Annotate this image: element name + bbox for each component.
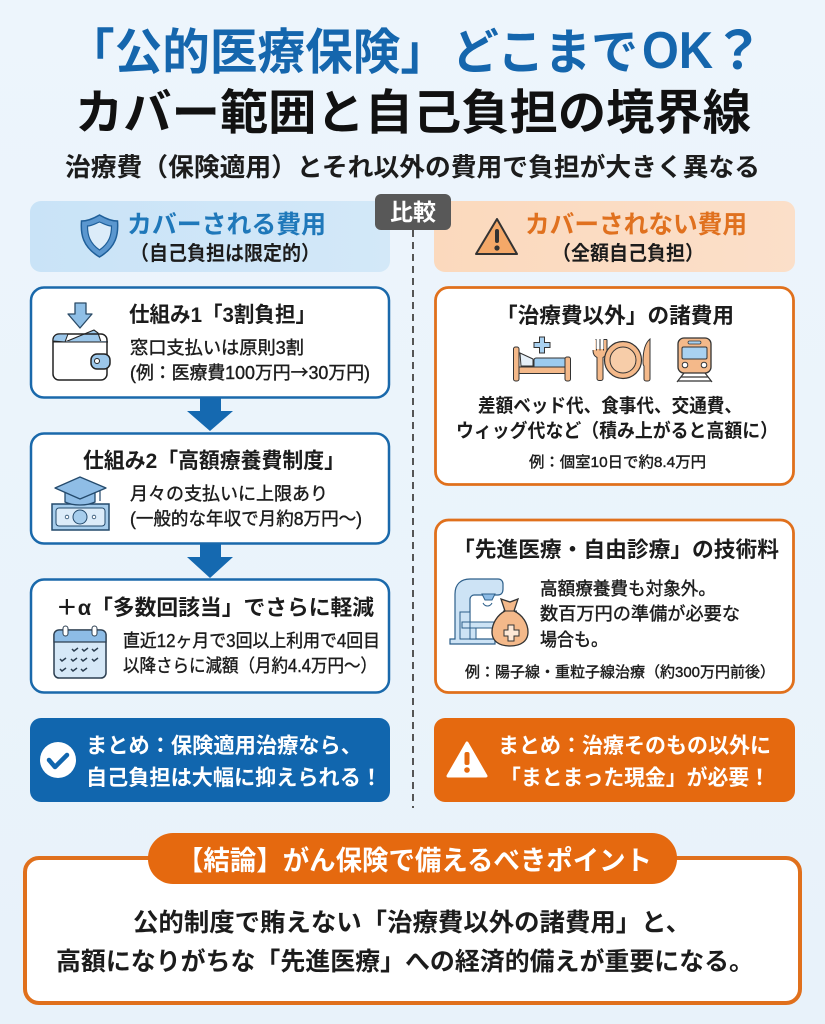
body text: 窓口支払いは原則3割 [130,338,304,358]
icon: check circle [40,742,76,778]
panel: other costs [436,288,794,484]
heading: 「先進医療・自由診療」の技術料 [453,538,779,562]
comparison tag: 比較 [390,199,436,225]
heading: ＋α「多数回該当」でさらに軽減 [56,596,375,620]
panel: not covered summary: 「まとまった現金」が必要！ [500,765,770,790]
title line 1 [67,22,764,81]
title line 2: カバー範囲と自己負担の境界線 [75,87,751,140]
example: 例：個室10日で約8.4万円 [529,454,706,471]
icon: fork plate knife [592,339,650,381]
panel: covered header [30,201,390,272]
icon: calendar [54,626,106,678]
arrow [187,544,233,578]
panel: multiple use reduction: 以降さらに減額（月約4.4万円～） [123,656,377,676]
panel: other costs: ウィッグ代など（積み上がると高額に） [456,419,778,442]
heading: カバーされる費用 [127,211,326,239]
heading: 仕組み2「高額療養費制度」 [83,449,345,473]
icon: wallet [53,303,110,380]
title line 1: OK [642,22,713,80]
arrow [187,398,233,431]
conclusion tag: 【結論】がん保険で備えるべきポイント [177,845,652,876]
body text: 差額ベッド代、食事代、交通費、 [478,395,742,417]
panel: advanced medicine: 場合も。 [540,630,608,650]
heading: 「治療費以外」の諸費用 [496,304,734,328]
panel: advanced medicine [436,520,794,692]
icon: train [677,338,712,382]
panel: mechanism 2: (一般的な年収で月約8万円～) [130,509,362,529]
panel: not covered header [434,201,795,272]
subheading: （自己負担は限定的） [130,242,320,265]
heading: カバーされない費用 [525,211,747,239]
comparison tag [375,194,451,230]
title line 1: どこまで [452,26,638,80]
heading: 仕組み1「3割負担」 [129,303,316,327]
panel: conclusion [25,833,800,1003]
panel: mechanism 1: (例：医療費100万円→30万円) [130,359,370,385]
body text: 月々の支払いに上限あり [130,484,328,504]
panel: covered summary: 自己負担は大幅に抑えられる！ [86,766,382,790]
example: 例：陽子線・重粒子線治療（約300万円前後） [465,664,775,681]
summary text: まとめ：治療そのもの以外に [498,734,771,758]
panel: conclusion: 高額になりがちな「先進医療」への経済的備えが重要になる。 [56,947,754,976]
icon: cap and banknote [52,477,109,530]
title line 1: ？ [712,23,764,81]
body text: 高額療養費も対象外。 [540,579,716,599]
icon: hospital bed [514,337,570,381]
subtitle: 治療費（保険適用）とそれ以外の費用で負担が大きく異なる [65,153,760,182]
panel: not covered summary [434,718,795,802]
summary text: まとめ：保険適用治療なら、 [86,734,362,758]
icon: warning white [448,743,486,776]
panel: mechanism 1 [31,288,389,398]
icon: medical machine and money bag [450,579,528,646]
body text: 直近12ヶ月で3回以上利用で4回目 [123,631,380,651]
icon: shield [81,215,118,257]
comparison divider [412,230,414,808]
subheading: （全額自己負担） [552,242,704,265]
conclusion text: 公的制度で賄えない「治療費以外の諸費用」と、 [133,909,691,937]
panel: mechanism 2 [31,434,389,544]
icon: warning triangle [476,219,517,254]
title line 1: 「公的医療保険」 [67,26,448,80]
panel: covered summary [30,718,390,802]
panel: multiple use reduction [31,580,389,692]
panel: advanced medicine: 数百万円の準備が必要な [540,604,740,624]
conclusion tag [148,833,677,884]
